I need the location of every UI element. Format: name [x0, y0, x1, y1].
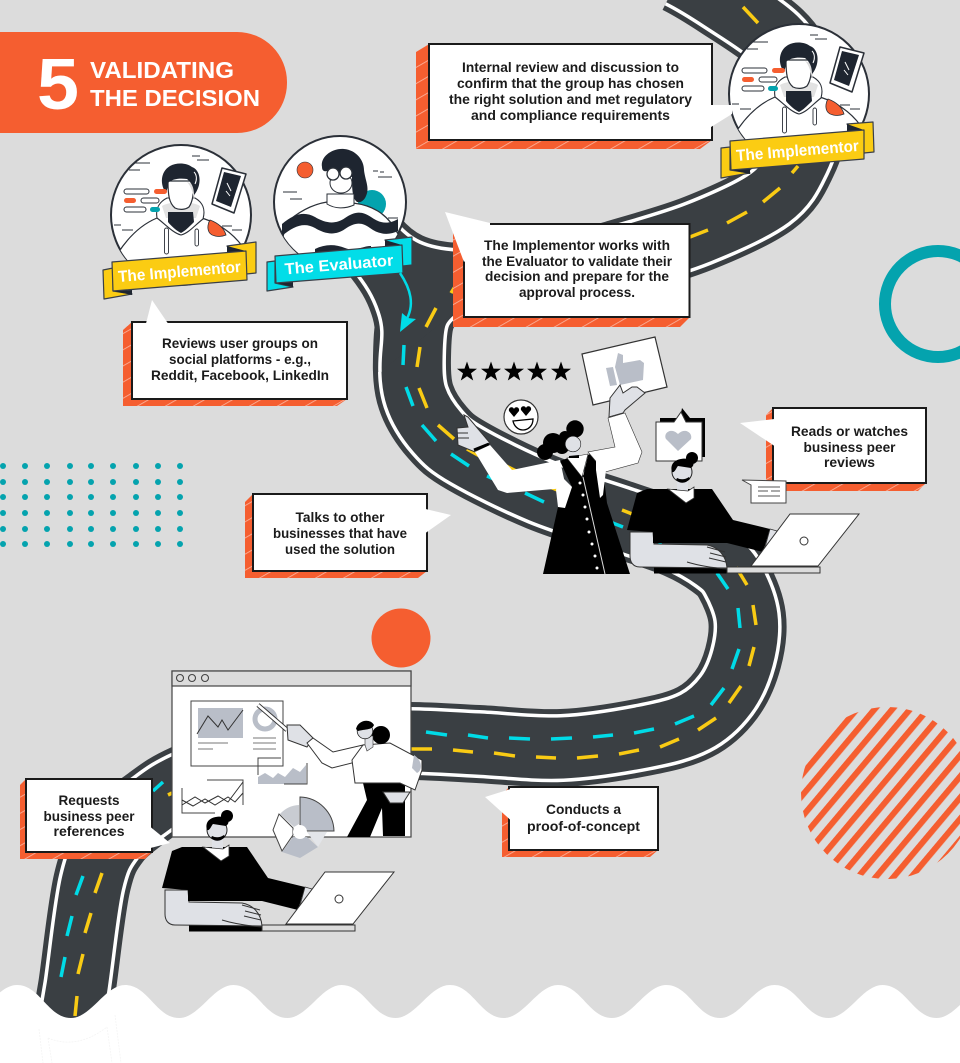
callout: reads or watches reviews: reviews: [824, 454, 875, 470]
road: winding highway: [61, 0, 810, 1040]
ribbon: The Implementor top right: The Implementor: [736, 138, 860, 165]
callout: reads or watches reviews: business peer: [804, 439, 896, 455]
callout: talks to other businesses: businesses that have: [273, 525, 407, 541]
callout: reads or watches reviews: [740, 408, 926, 491]
decoration: striped orange circle: [801, 707, 960, 879]
callout: talks to other businesses: used the solution: [285, 541, 395, 557]
stars rating: [457, 362, 571, 380]
callout: implementor works with evaluator: approval process.: [519, 284, 635, 300]
callout: requests business peer references: references: [54, 823, 125, 839]
chart: dashboard card: [191, 701, 283, 766]
illustration: presentation browser window: [172, 671, 411, 837]
icon: heart eyes smiley: [504, 400, 538, 434]
callout: internal review: confirm that the group has chosen: [457, 75, 684, 91]
callout: conducts proof-of-concept: [485, 787, 658, 857]
icon: small message bubble: [742, 480, 786, 503]
callout: conducts proof-of-concept: Conducts a: [546, 801, 621, 817]
title banner: THE DECISION: [90, 85, 260, 111]
callout: internal review: [416, 44, 732, 149]
figure: woman: [457, 385, 645, 574]
icon: thumbs up card: [582, 337, 667, 405]
callout: reviews user groups: Reddit, Facebook, LinkedIn: [151, 367, 329, 383]
callout: conducts proof-of-concept: proof-of-concept: [527, 818, 640, 834]
ribbon: The Implementor top right: [721, 122, 874, 178]
chart: area chart: [258, 758, 307, 784]
icon: implementor avatar left: [111, 145, 251, 285]
callout: talks to other businesses: [245, 494, 451, 578]
icon: implementor avatar top right: [729, 24, 869, 164]
figure: presenter woman: [258, 705, 422, 837]
callout: implementor works with evaluator: [445, 212, 690, 327]
callout: internal review: the right solution and met regulatory: [449, 91, 692, 107]
ribbon: The Evaluator: [267, 237, 412, 291]
decoration: orange circle: [372, 608, 430, 668]
title banner: VALIDATING: [90, 57, 234, 83]
callout: internal review: and compliance requirements: [471, 107, 670, 123]
ribbon: The Implementor left: The Implementor: [118, 259, 242, 286]
decoration: teal ring: [885, 251, 960, 357]
icon: evaluator avatar: [273, 135, 407, 254]
figure: man at laptop right: [627, 452, 859, 574]
title banner: [0, 32, 287, 133]
title banner: 5: [37, 45, 79, 125]
icon: heart speech bubble: [656, 408, 705, 461]
callout: requests business peer references: [20, 779, 170, 859]
callout: implementor works with evaluator: the Evaluator to validate their: [482, 253, 673, 269]
callout: requests business peer references: Requests: [58, 792, 120, 808]
callout: reviews user groups: Reviews user groups on: [162, 335, 318, 351]
ribbon: The Implementor left: [103, 242, 256, 299]
decoration: teal dot grid: [0, 463, 183, 547]
ribbon: The Evaluator: The Evaluator: [284, 253, 394, 278]
chart: pie chart: [273, 797, 334, 858]
figure: man at laptop bottom: [162, 810, 394, 932]
chart: line chart: [182, 780, 243, 813]
faint road outline below wave: [39, 1015, 121, 1063]
callout: implementor works with evaluator: The Implementor works with: [484, 237, 670, 253]
callout: reviews user groups: [123, 300, 347, 406]
arrow: cyan road direction: [400, 273, 416, 332]
callout: implementor works with evaluator: decision and prepare for the: [485, 268, 669, 284]
callout: reads or watches reviews: Reads or watches: [791, 423, 908, 439]
callout: internal review: Internal review and discussion to: [462, 59, 679, 75]
callout: reviews user groups: social platforms - e.g.,: [169, 351, 311, 367]
footer wave: [0, 985, 960, 1063]
callout: requests business peer references: business peer: [44, 808, 135, 824]
callout: talks to other businesses: Talks to other: [296, 509, 385, 525]
illustration: woman with thumbs up and rating: [457, 337, 667, 574]
